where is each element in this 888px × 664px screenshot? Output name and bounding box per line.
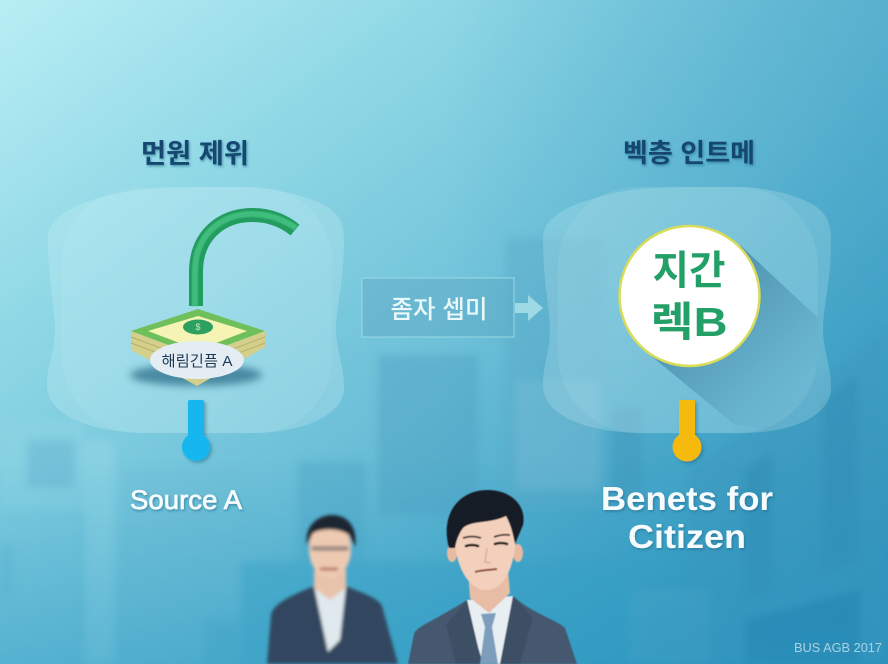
- eyes: [466, 543, 507, 546]
- person: man in suit at front: [408, 490, 577, 664]
- stack label pill: [150, 341, 244, 379]
- ears: [447, 544, 457, 562]
- watermark: BUS AGB 2017: [794, 641, 882, 655]
- banknote stack body: [131, 331, 265, 386]
- badge: circle with text: 렉B: [650, 299, 728, 345]
- icon: blue pin: [182, 400, 210, 461]
- label: Benets for Citizen: [601, 480, 773, 555]
- ground shadow: [130, 364, 262, 386]
- hair: [447, 490, 524, 548]
- neck: [468, 570, 510, 613]
- badge: circle with text: [620, 226, 760, 366]
- icon: stack of banknotes: $: [195, 322, 201, 332]
- nose: [485, 548, 491, 563]
- brows: [463, 535, 510, 538]
- tie: [480, 613, 498, 664]
- banknote top: [131, 309, 265, 356]
- long shadow of circle: [650, 245, 818, 430]
- label: Benets for Citizen: Citizen: [628, 518, 746, 555]
- center flow box with arrow: [362, 278, 543, 337]
- head: [454, 505, 516, 590]
- banknote seal: [183, 320, 213, 334]
- arrow: [515, 295, 543, 321]
- right heading: 벡층 인트메: [623, 138, 755, 168]
- flow box: [362, 278, 514, 337]
- person: blurred man at left: [267, 515, 398, 664]
- left heading: 먼원 제위: [141, 139, 249, 169]
- lapels: [446, 596, 533, 664]
- label: Source A: Source A: [130, 485, 242, 515]
- badge: circle with text: 지간: [652, 249, 726, 293]
- jacket: [408, 596, 577, 664]
- icon: green curved pipe: [195, 214, 296, 306]
- label: Benets for Citizen: Benets for: [601, 480, 773, 517]
- mouth: [475, 569, 497, 572]
- background: blurred city buildings: [0, 238, 888, 664]
- icon: stack of banknotes: [130, 309, 265, 386]
- flow box label: 좀자 셉미: [390, 296, 488, 324]
- panel: left glass card: [47, 187, 344, 433]
- panel: right glass card: [543, 187, 831, 433]
- shirt: [467, 596, 513, 664]
- icon: stack of banknotes: 해림긴픔 A: [162, 353, 232, 370]
- icon: yellow pin: [672, 400, 702, 462]
